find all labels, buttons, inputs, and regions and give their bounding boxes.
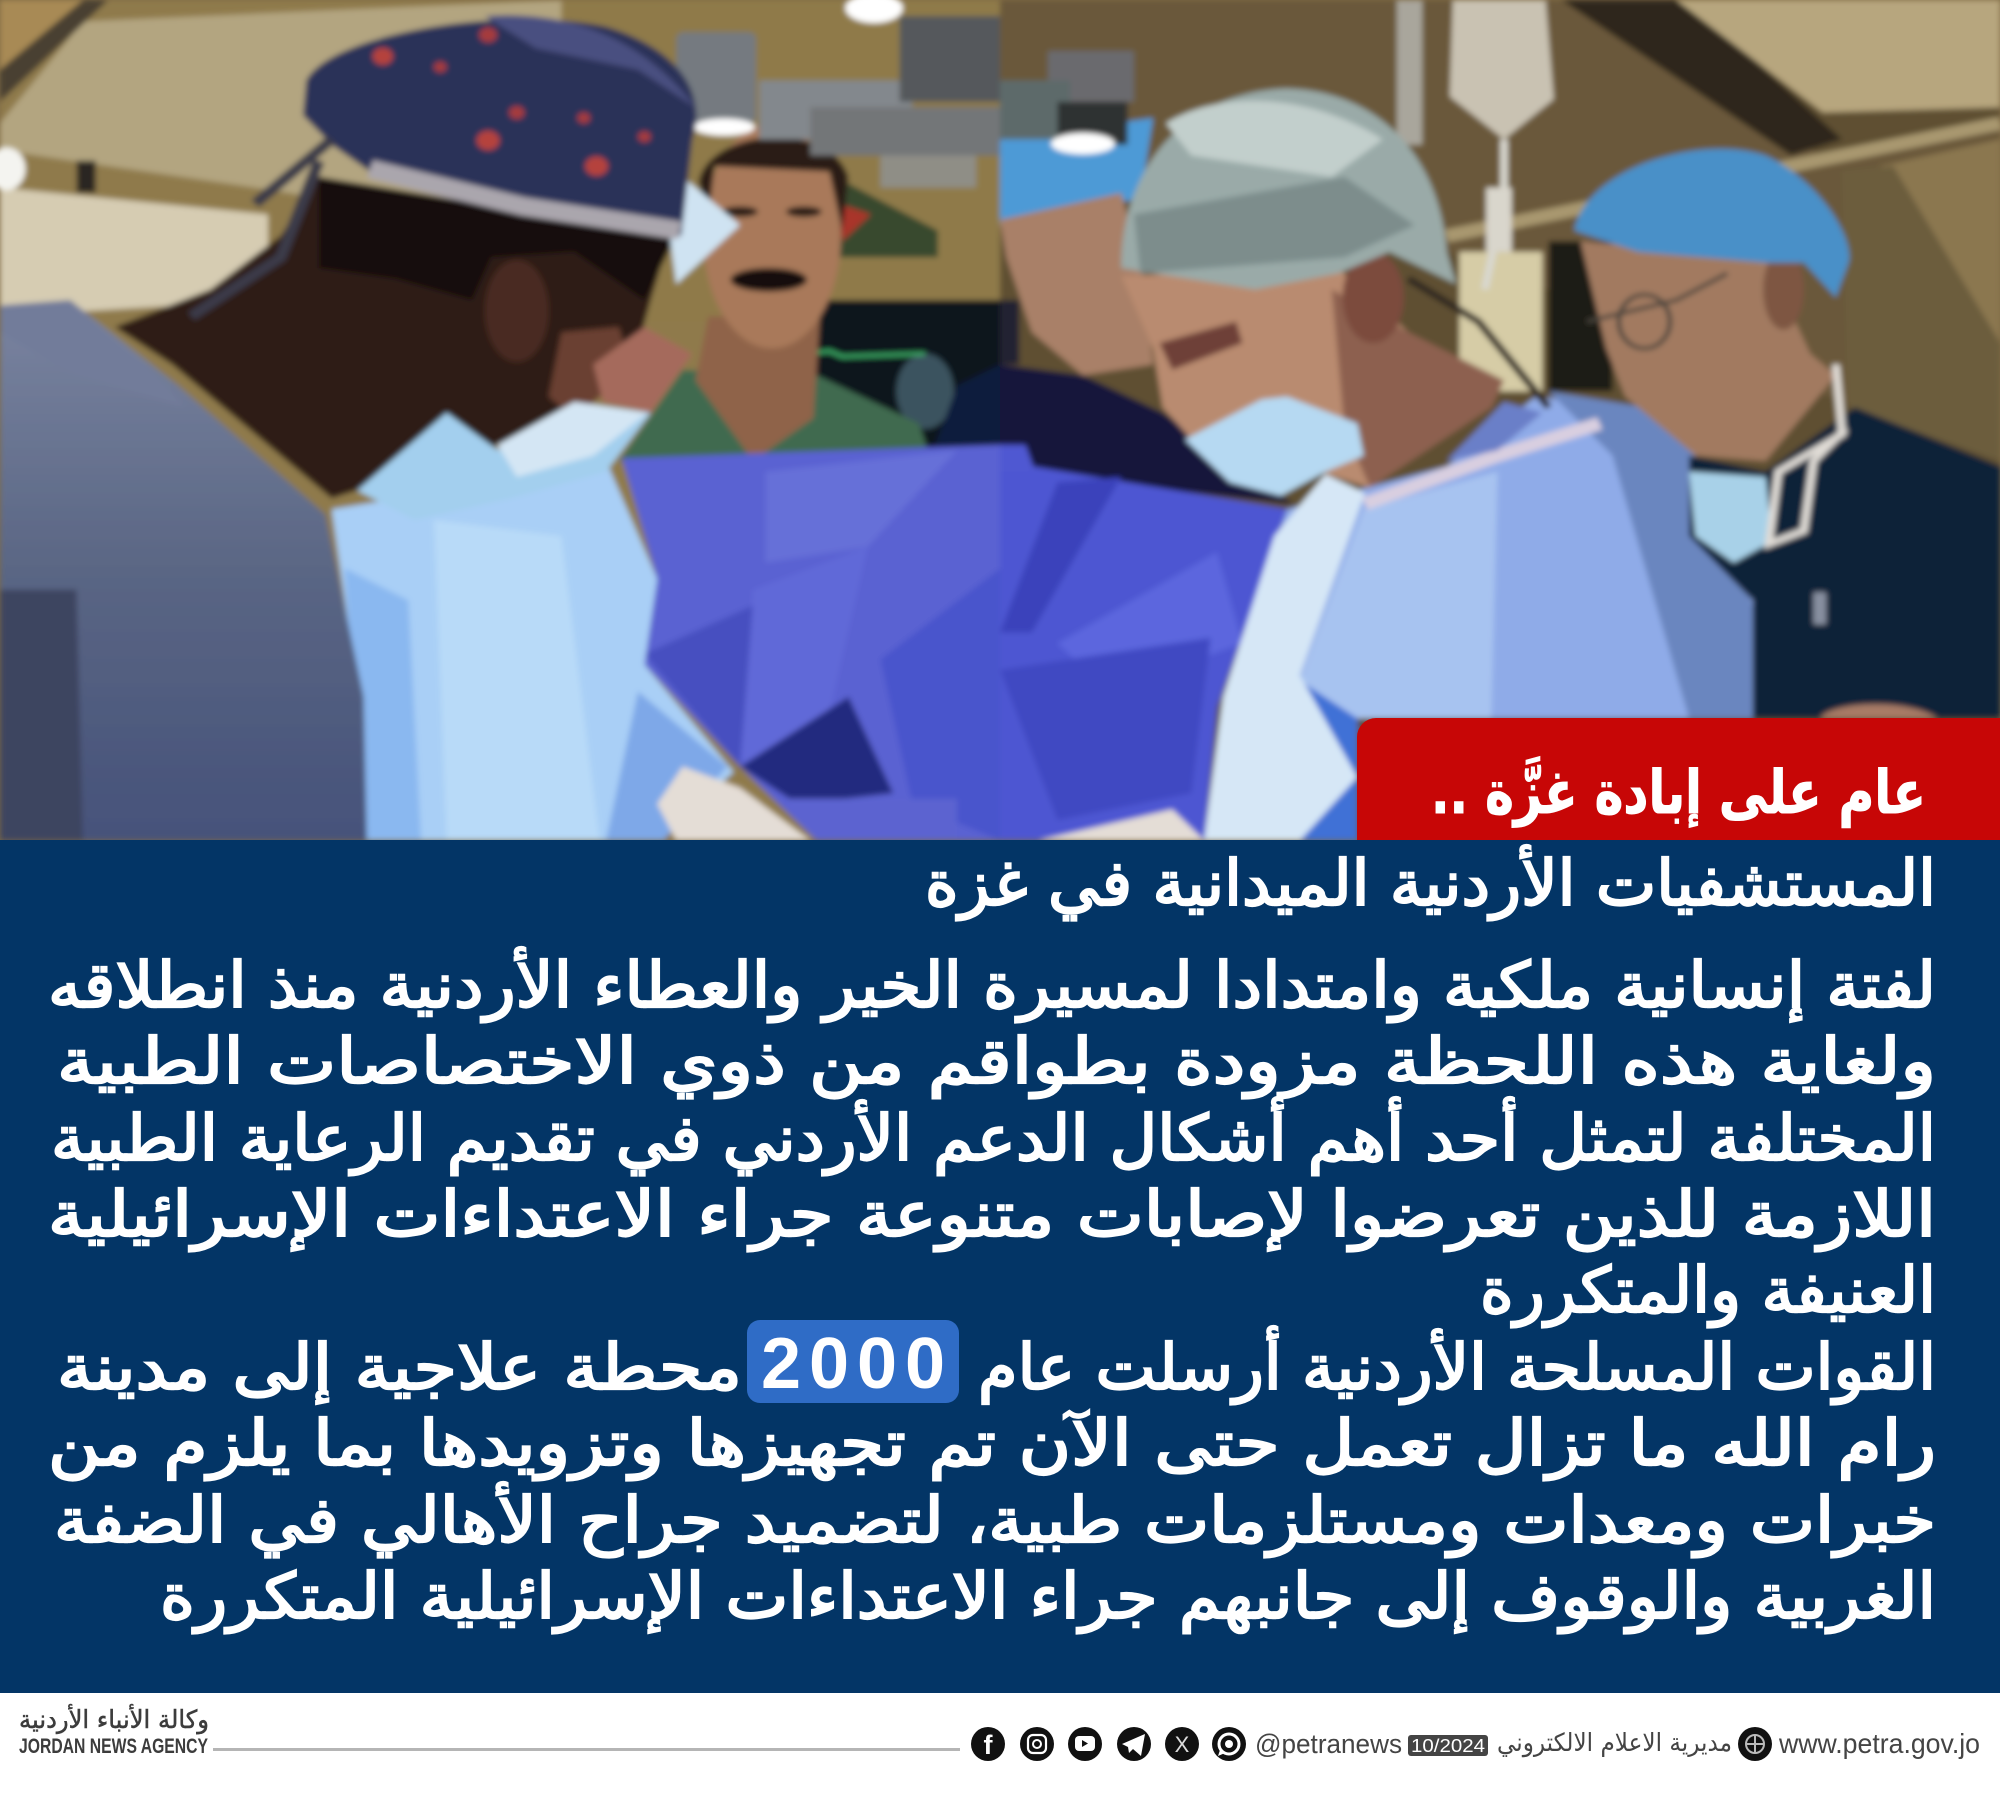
agency logo text xyxy=(19,1703,209,1758)
second paragraph: رام الله ما تزال تعمل حتى الآن تم تجهيزها وتزويدها بما يلزم من xyxy=(48,1407,1936,1481)
highlighted number 2000: 2000 xyxy=(761,1324,945,1404)
red tag with headline xyxy=(1357,718,2000,840)
icon: globe xyxy=(1738,1727,1772,1761)
right half of photo: surgeons, IV bag xyxy=(1000,0,2000,840)
icon: X: X xyxy=(1175,1732,1190,1757)
icon: youtube xyxy=(1068,1727,1102,1761)
icon: X xyxy=(1165,1727,1199,1761)
panel heading: المستشفيات الأردنية الميدانية في غزة xyxy=(925,844,1936,921)
icon: facebook: f xyxy=(984,1730,994,1760)
first paragraph xyxy=(48,946,1936,1328)
department name: مديرية الاعلام الالكتروني xyxy=(1497,1728,1732,1758)
first paragraph: اللازمة للذين تعرضوا لإصابات متنوعة جراء الاعتداءات الإسرائيلية xyxy=(48,1178,1936,1252)
navy text panel xyxy=(0,840,2000,1693)
second paragraph xyxy=(48,1326,1936,1634)
footer xyxy=(0,1693,2000,1799)
first paragraph: العنيفة والمتكررة xyxy=(1480,1254,1936,1328)
second paragraph: خبرات ومعدات ومستلزمات طبية، لتضميد جراح الأهالي في الضفة xyxy=(54,1481,1936,1558)
second paragraph: محطة علاجية إلى مدينة xyxy=(57,1331,742,1405)
icon: whatsapp xyxy=(1212,1727,1246,1761)
second paragraph: الغربية والوقوف إلى جانبهم جراء الاعتداءات الإسرائيلية المتكررة xyxy=(160,1560,1936,1634)
second paragraph: القوات المسلحة الأردنية أرسلت عام xyxy=(978,1326,1936,1405)
website: www.petra.gov.jo xyxy=(1778,1728,1980,1759)
first paragraph: لفتة إنسانية ملكية وامتدادا لمسيرة الخير والعطاء الأردنية منذ انطلاقه xyxy=(48,946,1936,1023)
icon: telegram xyxy=(1117,1727,1151,1761)
date badge: 10/2024 xyxy=(1411,1736,1485,1756)
first paragraph: ولغاية هذه اللحظة مزودة بطواقم من ذوي الاختصاصات الطبية xyxy=(57,1025,1936,1099)
agency logo text: وكالة الأنباء الأردنية xyxy=(19,1703,209,1735)
first paragraph: المختلفة لتمثل أحد أهم أشكال الدعم الأردني في تقديم الرعاية الطبية xyxy=(51,1097,1936,1176)
photo: surgeons in field hospital xyxy=(0,0,2000,840)
left half of photo: surgeons and staff xyxy=(0,0,1000,840)
social handle: @petranews xyxy=(1255,1729,1402,1759)
agency logo text: JORDAN NEWS AGENCY xyxy=(19,1735,208,1758)
icon: facebook xyxy=(971,1727,1005,1761)
icon: instagram xyxy=(1020,1727,1054,1761)
